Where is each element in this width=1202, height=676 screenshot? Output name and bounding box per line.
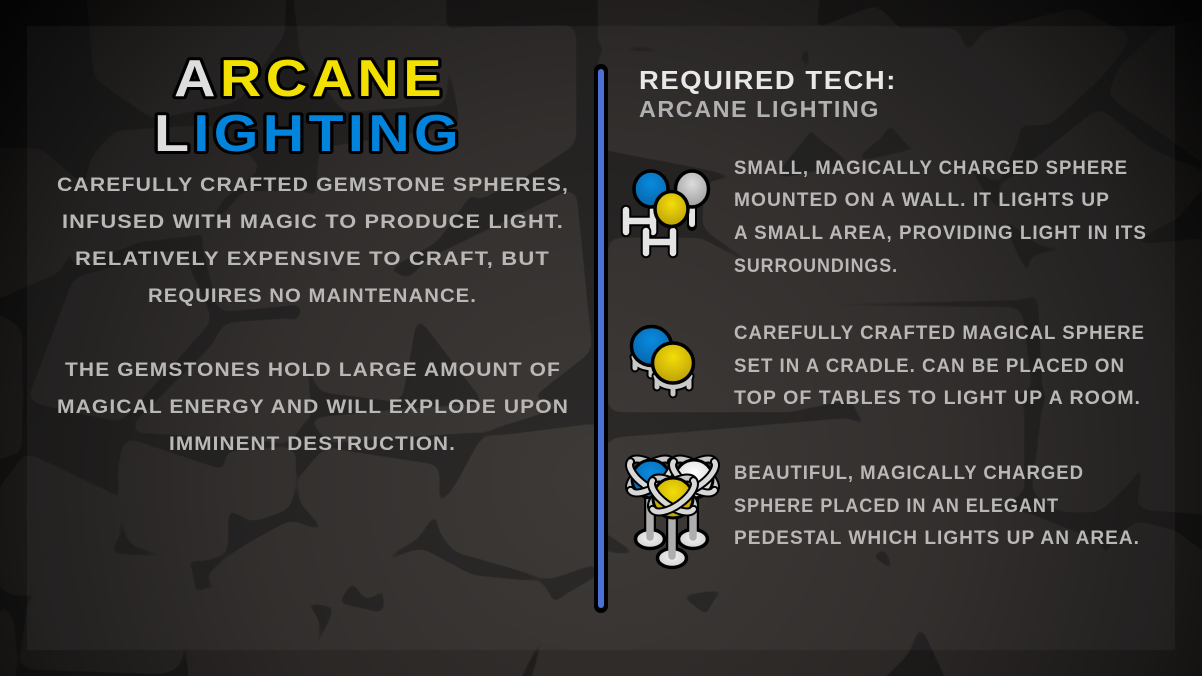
text: wall sphere description: SMALL, MAGICALLY CHARGED SPHERE — [734, 158, 1128, 179]
description: second paragraph: IMMINENT DESTRUCTION. — [169, 434, 456, 455]
text: cradle sphere description: TOP OF TABLES TO LIGHT UP A ROOM. — [734, 388, 1141, 409]
text: wall sphere description: MOUNTED ON A WALL. IT LIGHTS UP — [734, 190, 1110, 211]
heading: required tech: ARCANE LIGHTING — [639, 96, 880, 122]
text: pedestal sphere description: SPHERE PLACED IN AN ELEGANT — [734, 496, 1059, 517]
title — [154, 50, 463, 163]
description: second paragraph: THE GEMSTONES HOLD LARGE AMOUNT OF — [65, 360, 561, 381]
description: second paragraph — [57, 360, 569, 455]
description: first paragraph: CAREFULLY CRAFTED GEMSTONE SPHERES, — [57, 175, 569, 196]
heading: required tech — [639, 65, 897, 122]
title: LIGHTING — [154, 105, 463, 163]
title: ARCANE — [174, 50, 446, 108]
icon: pedestal spheres — [624, 453, 721, 568]
description: first paragraph: REQUIRES NO MAINTENANCE. — [148, 286, 477, 307]
description: second paragraph: MAGICAL ENERGY AND WILL EXPLODE UPON — [57, 397, 569, 418]
description: first paragraph — [57, 175, 569, 307]
heading: required tech: REQUIRED TECH: — [639, 65, 897, 95]
description: first paragraph: RELATIVELY EXPENSIVE TO CRAFT, BUT — [75, 249, 550, 270]
description: first paragraph: INFUSED WITH MAGIC TO PRODUCE LIGHT. — [62, 212, 564, 233]
text: wall sphere description: A SMALL AREA, PROVIDING LIGHT IN ITS — [734, 223, 1147, 244]
text: pedestal sphere description — [734, 463, 1140, 549]
text: cradle sphere description: CAREFULLY CRAFTED MAGICAL SPHERE — [734, 323, 1145, 344]
text: cradle sphere description — [734, 323, 1145, 409]
vertical divider — [594, 64, 608, 613]
icon: wall-mounted spheres — [626, 171, 708, 253]
text: pedestal sphere description: PEDESTAL WHICH LIGHTS UP AN AREA. — [734, 528, 1140, 549]
text: wall sphere description — [734, 158, 1147, 277]
text: wall sphere description: SURROUNDINGS. — [734, 256, 898, 277]
text: cradle sphere description: SET IN A CRADLE. CAN BE PLACED ON — [734, 356, 1125, 377]
text: pedestal sphere description: BEAUTIFUL, MAGICALLY CHARGED — [734, 463, 1084, 484]
icon: cradled spheres — [632, 326, 694, 394]
